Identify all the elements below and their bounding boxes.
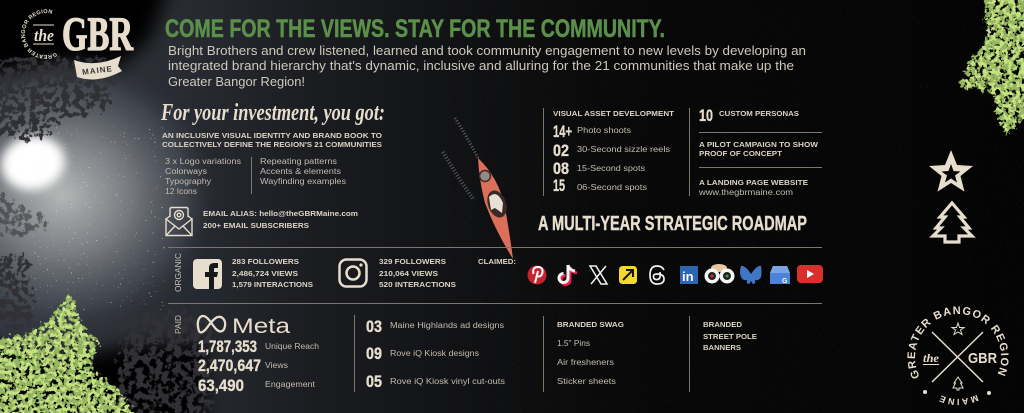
meta stats: 1,787,353 bbox=[198, 337, 257, 356]
trees: green foliage bottom left bbox=[0, 288, 140, 413]
intro text block: Bright Brothers and crew listened, learned and took community engagement to new levels by developing an bbox=[168, 43, 806, 58]
meta stats bbox=[198, 337, 319, 395]
title: COME FOR THE VIEWS. STAY FOR THE COMMUNITY. bbox=[165, 15, 665, 43]
divider lines bbox=[168, 248, 822, 304]
panel: street pole banners bbox=[690, 316, 757, 392]
panel: ad designs bbox=[354, 315, 505, 392]
panel: street pole banners: STREET POLE bbox=[703, 332, 757, 341]
instagram stats: 210,064 VIEWS bbox=[379, 269, 438, 278]
meta stats: 63,490 bbox=[198, 376, 244, 395]
trees: green foliage top right bbox=[956, 0, 1024, 140]
identity list: 3 x Logo variations bbox=[165, 157, 241, 166]
label: claimed: CLAIMED: bbox=[478, 257, 516, 266]
logo: the GBR Maine: the bbox=[34, 26, 54, 45]
panel: street pole banners: BANNERS bbox=[703, 343, 741, 352]
instagram stats: 329 FOLLOWERS bbox=[379, 257, 446, 266]
panel: visual asset development: 08 bbox=[553, 159, 569, 178]
identity list: Repeating patterns bbox=[260, 157, 337, 166]
facebook stats: 1,579 INTERACTIONS bbox=[232, 280, 313, 289]
panel: visual asset development: 15 bbox=[553, 176, 565, 195]
panel: visual asset development: 30-Second sizzle reels bbox=[577, 145, 670, 154]
panel: visual asset development: 02 bbox=[553, 141, 569, 160]
icon: tiktok bbox=[559, 265, 577, 284]
icon: star bbox=[929, 150, 973, 192]
panel: visual asset development: VISUAL ASSET DEVELOPMENT bbox=[553, 109, 674, 118]
identity description: COLLECTIVELY DEFINE THE REGION'S 21 COMMUNITIES bbox=[162, 140, 382, 149]
label: paid: PAID bbox=[174, 315, 183, 334]
icon: pinterest bbox=[528, 266, 546, 284]
email alias: 200+ EMAIL SUBSCRIBERS bbox=[203, 221, 309, 230]
identity list: Wayfinding examples bbox=[260, 177, 346, 186]
heading: roadmap: A MULTI-YEAR STRATEGIC ROADMAP bbox=[538, 213, 807, 235]
identity description bbox=[162, 131, 382, 149]
panel: ad designs: 03 bbox=[366, 317, 382, 336]
facebook stats bbox=[232, 257, 313, 289]
meta stats: Unique Reach bbox=[265, 342, 319, 351]
badge: Greater Bangor Region: MAINE bbox=[939, 394, 978, 405]
panel: personas, pilot campaign, website: PROOF OF CONCEPT bbox=[699, 149, 782, 158]
icon: instagram bbox=[340, 260, 366, 286]
panel: visual asset development bbox=[544, 108, 674, 196]
instagram stats: 520 INTERACTIONS bbox=[379, 280, 456, 289]
panel: branded swag: 1.5" Pins bbox=[557, 339, 590, 348]
icon: yellow arrow bbox=[619, 266, 637, 284]
identity list: Accents & elements bbox=[260, 167, 341, 176]
panel: branded swag: BRANDED SWAG bbox=[557, 320, 624, 329]
identity list: Typography bbox=[165, 177, 211, 186]
label: organic: ORGANIC bbox=[174, 253, 183, 292]
icons: claimed social platforms bbox=[528, 264, 823, 285]
panel: visual asset development: 15-Second spots bbox=[577, 164, 645, 173]
panel: personas, pilot campaign, website: 10 bbox=[699, 106, 713, 125]
meta stats: 2,470,647 bbox=[198, 356, 261, 375]
logo: the GBR Maine: MAINE bbox=[82, 64, 113, 77]
panel: ad designs: 09 bbox=[366, 344, 382, 363]
kayak wake bbox=[443, 118, 478, 200]
icon: linkedin: in bbox=[682, 269, 694, 284]
icon: google business: G bbox=[782, 278, 788, 285]
identity list: 12 Icons bbox=[165, 187, 197, 196]
panel: personas, pilot campaign, website: A LANDING PAGE WEBSITE bbox=[699, 178, 808, 187]
kayak bbox=[478, 158, 513, 259]
icon: x bbox=[590, 266, 607, 284]
panel: personas, pilot campaign, website: CUSTOM PERSONAS bbox=[719, 109, 799, 118]
icon: linkedin bbox=[680, 266, 698, 284]
email alias bbox=[203, 209, 358, 230]
icon: email bbox=[166, 208, 192, 236]
script heading: For your investment, you got: bbox=[160, 100, 385, 126]
icon: facebook bbox=[193, 259, 222, 289]
panel: ad designs: 05 bbox=[366, 372, 382, 391]
logo: the GBR Maine bbox=[20, 8, 134, 80]
icon: bluesky bbox=[740, 266, 762, 284]
meta stats: Engagement bbox=[265, 380, 316, 389]
panel: ad designs: Rove iQ Kiosk vinyl cut-outs bbox=[390, 377, 505, 386]
identity description: AN INCLUSIVE VISUAL IDENTITY AND BRAND BOOK TO bbox=[162, 131, 382, 140]
panel: street pole banners: BRANDED bbox=[703, 320, 743, 329]
identity list: Colorways bbox=[165, 167, 207, 176]
badge: Greater Bangor Region: GREATER BANGOR REGION bbox=[907, 306, 1009, 378]
panel: visual asset development: 06-Second spots bbox=[577, 183, 647, 192]
panel: personas, pilot campaign, website: www.thegbrmaine.com bbox=[698, 188, 793, 197]
badge: Greater Bangor Region: GBR bbox=[968, 350, 997, 367]
instagram stats bbox=[379, 257, 456, 289]
logo: the GBR Maine: GREATER BANGOR REGION bbox=[20, 9, 57, 59]
icon: google business bbox=[770, 266, 790, 285]
icon: tripadvisor bbox=[704, 264, 734, 284]
identity list bbox=[165, 157, 346, 196]
intro text block bbox=[168, 43, 806, 89]
icon: tree bbox=[933, 203, 972, 242]
badge: Greater Bangor Region: the bbox=[923, 351, 940, 365]
panel: branded swag: Sticker sheets bbox=[557, 377, 616, 386]
intro text block: Greater Bangor Region! bbox=[168, 74, 305, 89]
intro text block: integrated brand hierarchy that's dynamic, inclusive and alluring for the 21 communities that make up the bbox=[168, 58, 794, 73]
email alias: EMAIL ALIAS: hello@theGBRMaine.com bbox=[203, 209, 358, 218]
facebook stats: 2,486,724 VIEWS bbox=[232, 269, 298, 278]
panel: ad designs: Rove iQ Kiosk designs bbox=[390, 349, 479, 358]
panel: visual asset development: 14+ bbox=[553, 122, 572, 141]
logo: the GBR Maine: GBR bbox=[62, 8, 134, 61]
panel: branded swag bbox=[544, 316, 624, 392]
meta logo: Meta bbox=[232, 315, 290, 338]
icon: threads bbox=[650, 266, 664, 284]
meta logo bbox=[198, 315, 290, 338]
panel: personas, pilot campaign, website bbox=[690, 106, 822, 197]
panel: branded swag: Air fresheners bbox=[557, 358, 614, 367]
panel: personas, pilot campaign, website: A PILOT CAMPAIGN TO SHOW bbox=[699, 140, 819, 149]
icon: youtube bbox=[797, 265, 823, 283]
panel: visual asset development: Photo shoots bbox=[577, 126, 631, 135]
meta stats: Views bbox=[265, 361, 288, 370]
facebook stats: 283 FOLLOWERS bbox=[232, 257, 299, 266]
panel: ad designs: Maine Highlands ad designs bbox=[390, 321, 504, 330]
